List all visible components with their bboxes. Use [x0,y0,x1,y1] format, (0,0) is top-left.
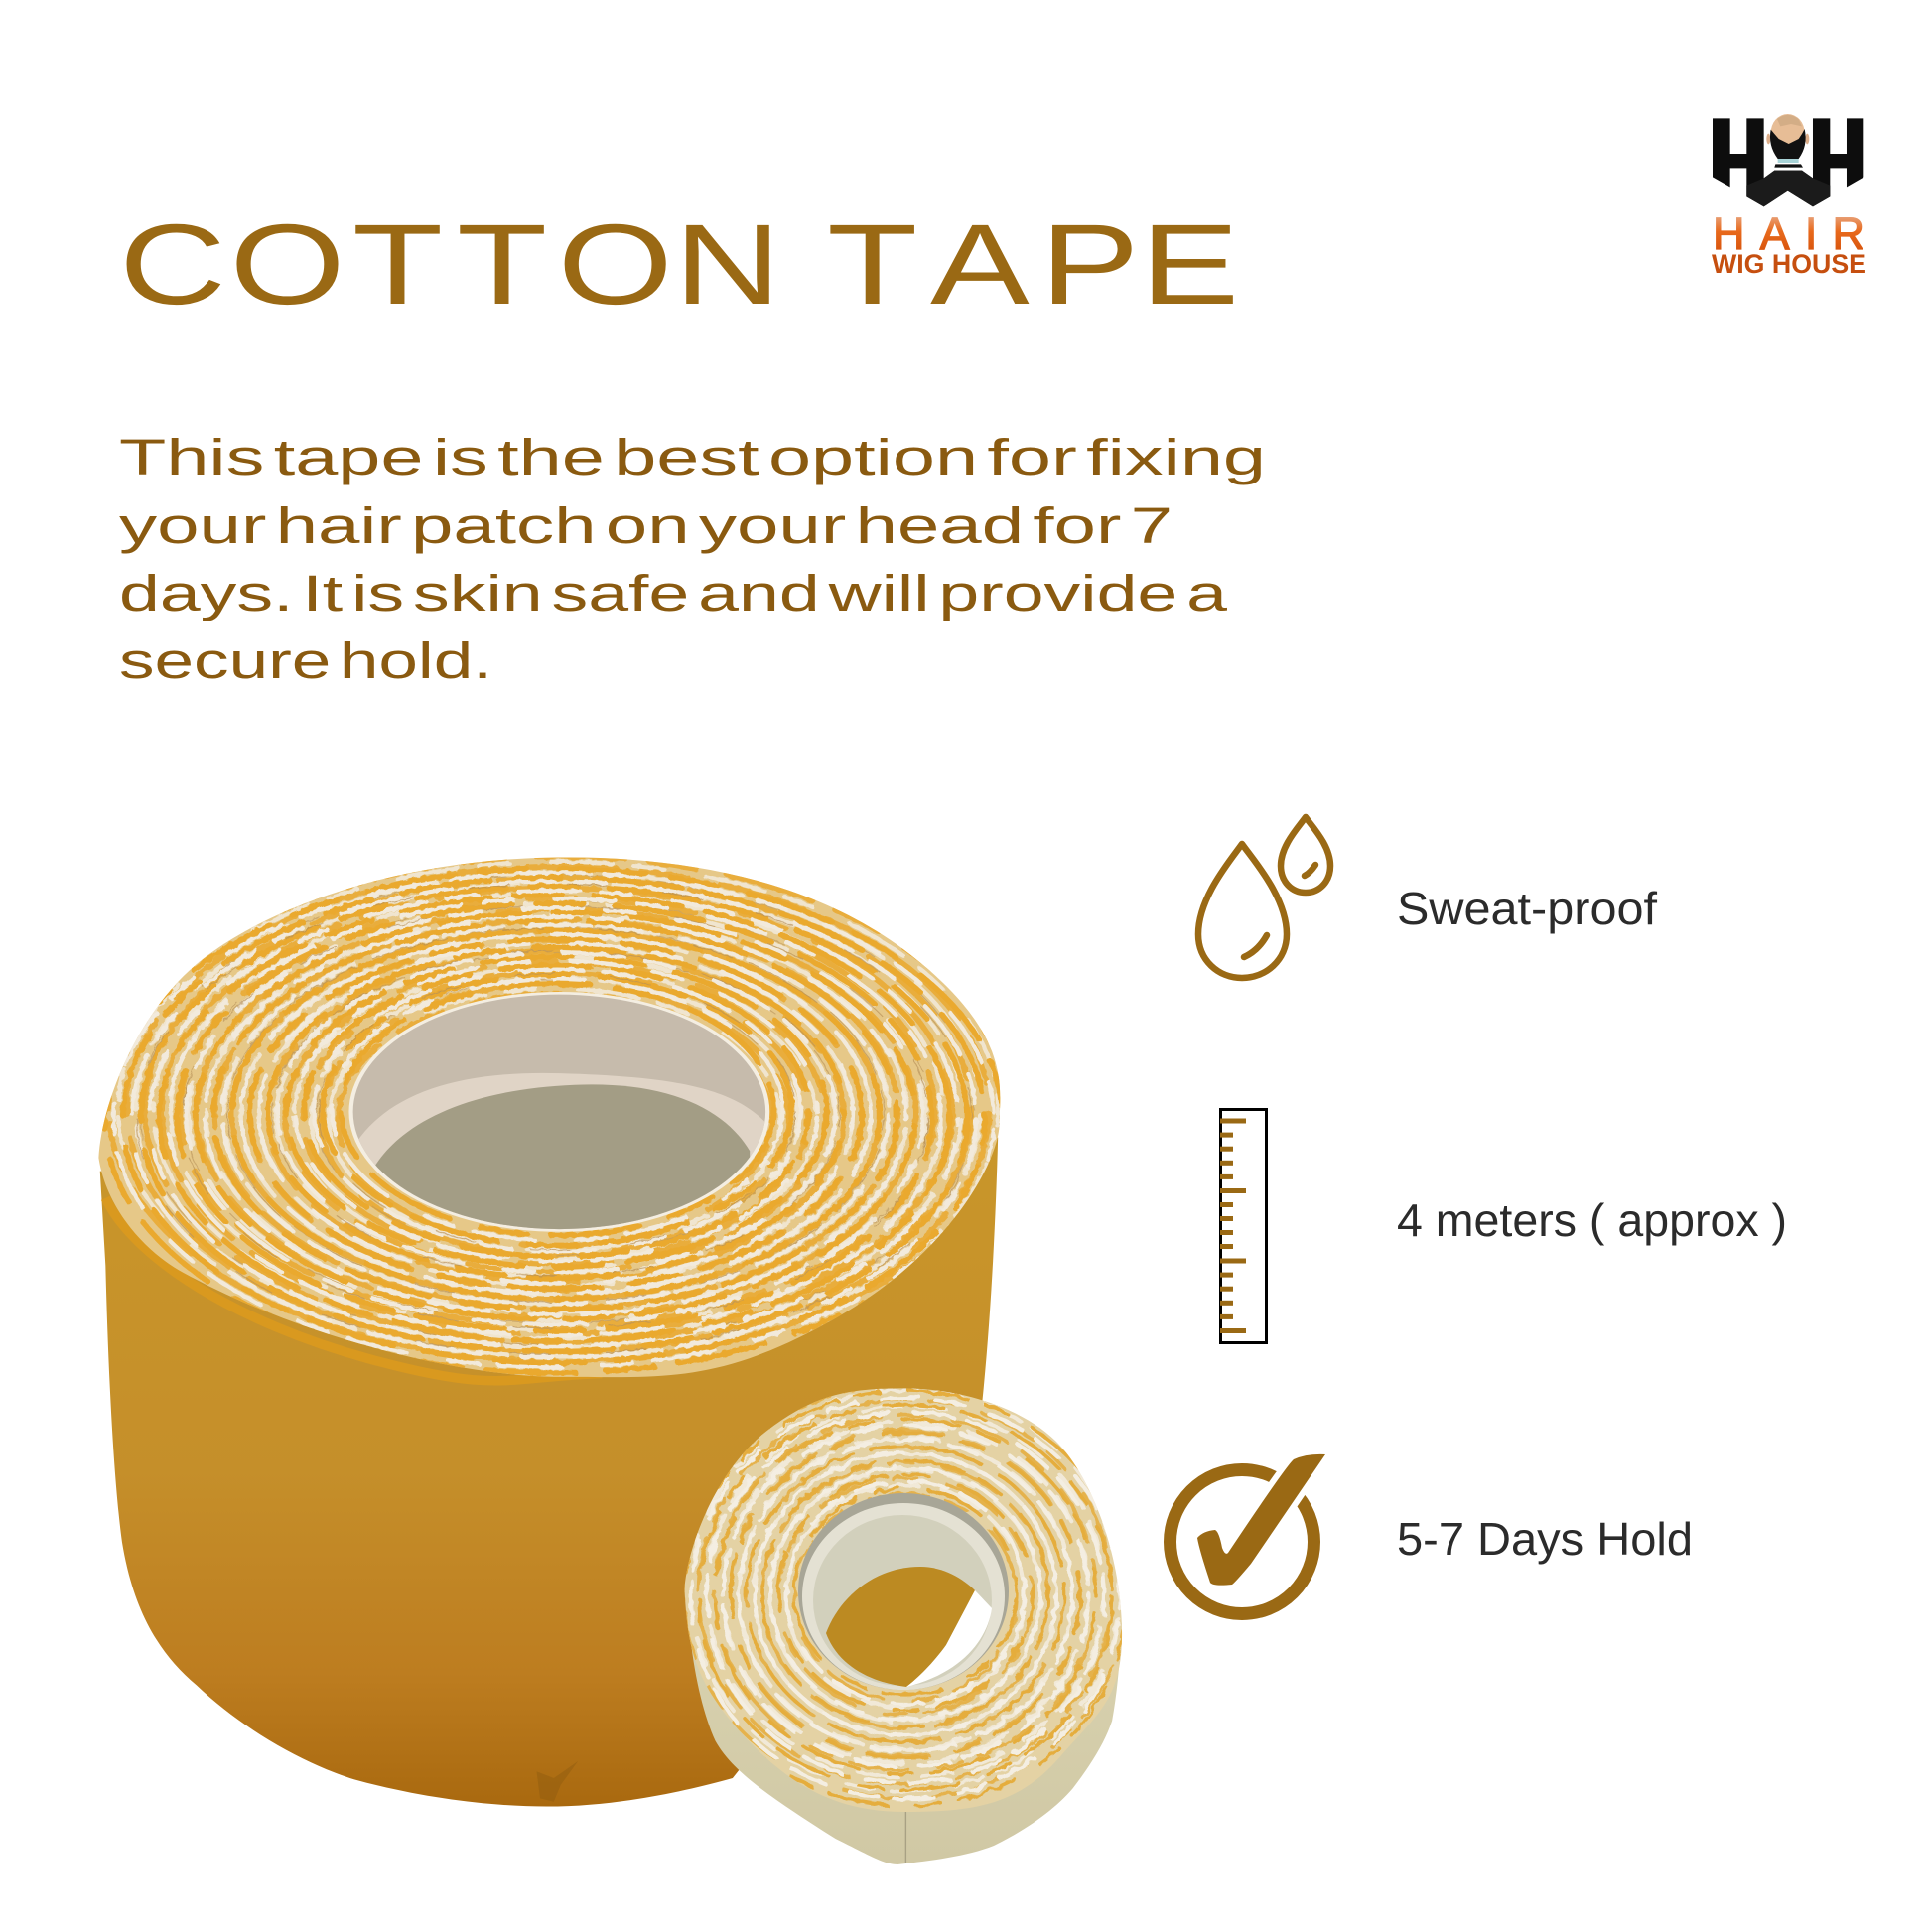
centre hole [348,992,769,1239]
roll top surface [98,858,1000,1377]
small roll top surface [684,1388,1122,1812]
icon: sweat drops [1198,817,1330,978]
logo text: HAIR: HAIR [1713,208,1864,259]
label: 5-7 Days Hold: 5-7 Days Hold [1397,1513,1693,1565]
description text block [119,429,1266,689]
view through the hole [826,1567,975,1687]
photo: small cotton tape roll [683,1383,1128,1864]
logo text: WIG HOUSE: WIG HOUSE [1712,249,1866,279]
description text block: This tape is the best option for fixing [119,429,1266,485]
small roll side [684,1388,1122,1864]
small roll wound layers [683,1383,1128,1806]
wound layers [105,856,1007,1373]
label: 4 meters: 4 meters ( approx ) [1397,1194,1787,1246]
icon: check mark in circle [1170,1454,1325,1614]
small roll centre hole [798,1493,1009,1690]
stain mark [537,1761,578,1802]
label: Sweat-proof: Sweat-proof [1397,883,1657,934]
title: COTTON TAPE [119,202,1239,329]
logo mark: HWH letters with head [1713,114,1863,206]
icon: ruler [1220,1110,1267,1342]
outer wound rim [105,1198,602,1381]
description text block: secure hold. [119,632,492,689]
logo: Hair Wig House [1712,114,1866,279]
description text block: days. It is skin safe and will provide a [119,565,1228,621]
photo: large cotton tape roll [98,856,1007,1807]
roll side [100,1138,998,1807]
description text block: your hair patch on your head for 7 [119,497,1173,554]
